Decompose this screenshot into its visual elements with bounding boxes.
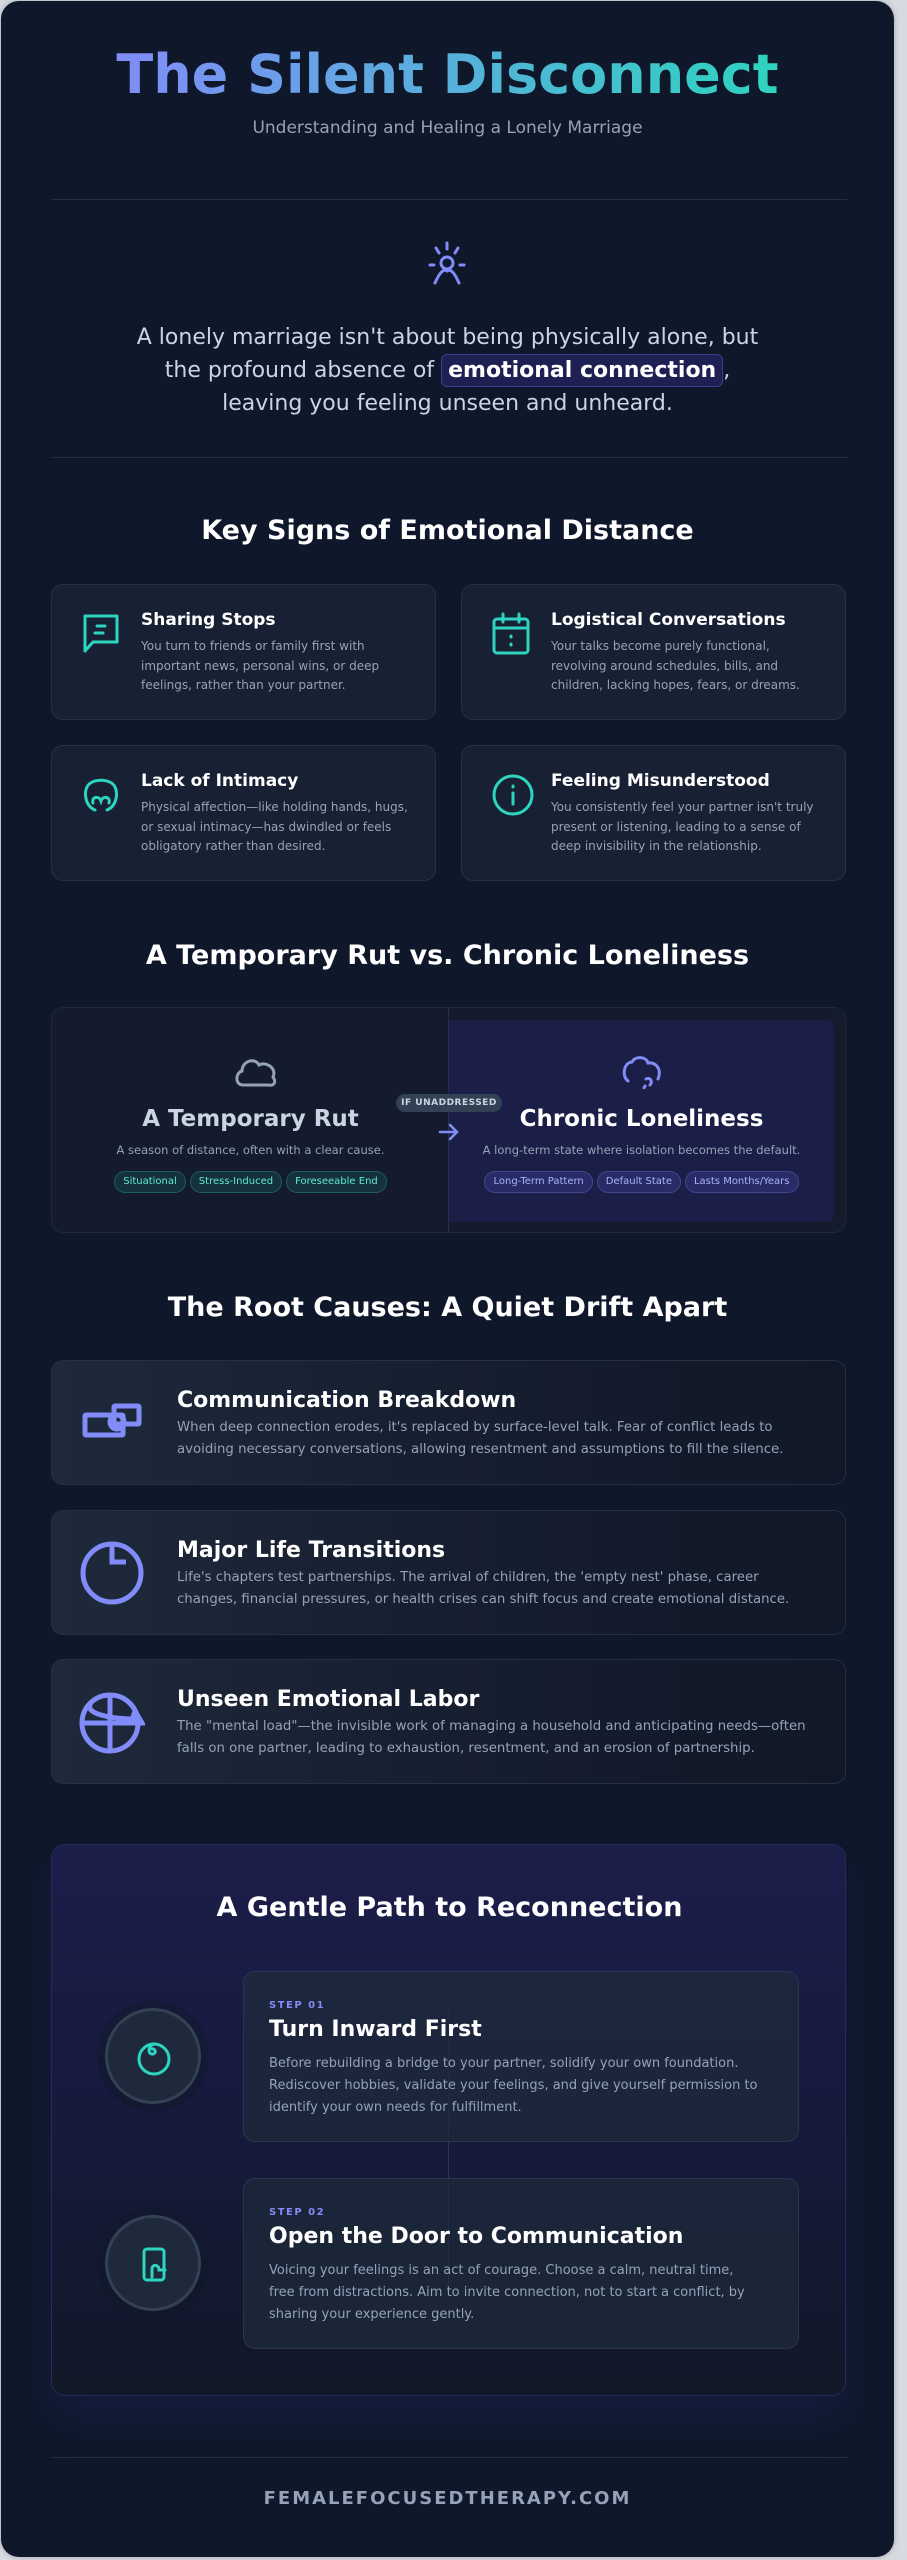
intro quote	[137, 325, 758, 416]
right highlight: chronic loneliness	[449, 1020, 834, 1222]
panel: major life transitions	[51, 1510, 846, 1635]
icon: step 2 door	[105, 2215, 201, 2311]
panel: comparison	[51, 1007, 846, 1233]
badge: if unaddressed	[396, 1094, 502, 1112]
desc: rut: A season of distance, often with a clear cause.	[117, 1143, 384, 1157]
tags: rut	[114, 1171, 387, 1193]
heading: reconnection: A Gentle Path to Reconnection	[217, 1892, 682, 1923]
icon: radiant person	[428, 242, 466, 284]
footer: FEMALEFOCUSEDTHERAPY.COM	[264, 2488, 631, 2509]
tags: rut: Situational	[123, 1176, 177, 1187]
title: temporary rut: A Temporary Rut	[142, 1106, 359, 1132]
panel: feeling misunderstood: You consistently feel your partner isn't truly present or listening, leading to a sense of deep invisibility in the relationship.	[551, 800, 814, 853]
arrow	[438, 1124, 459, 1140]
tags: rut: Stress-Induced	[199, 1176, 273, 1187]
tags: chronic: Lasts Months/Years	[694, 1176, 790, 1187]
tags: chronic: Long-Term Pattern	[493, 1176, 584, 1187]
tags: rut: Foreseeable End	[295, 1176, 378, 1187]
icon: calendar	[492, 612, 530, 654]
tags: chronic: Default State	[606, 1176, 672, 1187]
step 1 card	[243, 1971, 799, 2142]
step 1 card: Turn Inward First	[269, 2017, 482, 2042]
panel: lack of intimacy: Physical affection—like holding hands, hugs, or sexual intimacy—has dwindled or feels obligatory rather than desired.	[141, 800, 408, 853]
panel: unseen emotional labor	[51, 1659, 846, 1784]
panel: lack of intimacy	[51, 745, 436, 881]
intro quote: emotional connection	[448, 358, 716, 383]
panel: sharing stops: Sharing Stops	[141, 610, 276, 630]
panel: unseen emotional labor: Unseen Emotional Labor	[177, 1687, 479, 1712]
step 1 card: STEP 01	[269, 2000, 325, 2011]
icon: cloud	[235, 1059, 276, 1087]
step 2 card	[243, 2178, 799, 2349]
step 1 card: Before rebuilding a bridge to your partner, solidify your own foundation. Rediscover hobbies, validate your feelings, and give yourself permission to identify your own needs for fulfillment.	[269, 2056, 758, 2115]
intro quote: the profound absence of ,	[165, 358, 730, 383]
desc: chronic: A long-term state where isolation becomes the default.	[483, 1143, 800, 1157]
panel: lack of intimacy: Lack of Intimacy	[141, 771, 298, 791]
heading: key signs: Key Signs of Emotional Distance	[201, 515, 694, 546]
panel: communication breakdown: Communication Breakdown	[177, 1388, 516, 1413]
panel: feeling misunderstood	[461, 745, 846, 881]
panel: logistical conversations: Your talks become purely functional, revolving around schedules, bills, and children, lacking hopes, fears, or dreams.	[551, 639, 800, 692]
heading: root causes: The Root Causes: A Quiet Drift Apart	[168, 1292, 727, 1323]
step 2 card: Voicing your feelings is an act of courage. Choose a calm, neutral time, free from distractions. Aim to invite connection, not to start a conflict, by sharing your experience gently.	[269, 2263, 745, 2322]
panel: feeling misunderstood: Feeling Misunderstood	[551, 771, 770, 791]
subtitle: Understanding and Healing a Lonely Marriage	[252, 118, 643, 138]
badge: if unaddressed: IF UNADDRESSED	[401, 1098, 497, 1108]
step 2 card: STEP 02	[269, 2207, 325, 2218]
icon: info	[492, 774, 534, 816]
step 2 card: Open the Door to Communication	[269, 2224, 683, 2249]
panel: sharing stops	[51, 584, 436, 720]
intro quote: leaving you feeling unseen and unheard.	[222, 391, 673, 416]
icon: step 1 spiral	[105, 2008, 201, 2104]
panel: unseen emotional labor: The "mental load"—the invisible work of managing a household and anticipating needs—often falls on one partner, leading to exhaustion, resentment, and an erosion of partnership.	[177, 1719, 806, 1756]
panel: sharing stops: You turn to friends or family first with important news, personal wins, or deep feelings, rather than your partner.	[141, 639, 379, 692]
title: The Silent Disconnect	[116, 43, 779, 106]
icon: heart circle	[84, 778, 118, 812]
tags: chronic	[484, 1171, 799, 1193]
panel: logistical conversations: Logistical Conversations	[551, 610, 786, 630]
panel: communication breakdown	[51, 1360, 846, 1485]
icon: globe	[80, 1692, 145, 1754]
panel: logistical conversations	[461, 584, 846, 720]
panel: major life transitions: Life's chapters test partnerships. The arrival of children, the 'empty nest' phase, career changes, financial pressures, or health crises can shift focus and create emotional distance.	[177, 1570, 789, 1607]
panel: communication breakdown: When deep connection erodes, it's replaced by surface-level talk. Fear of conflict leads to avoiding necessary conversations, allowing resentment and assumptions to fill the silence.	[177, 1420, 783, 1457]
intro quote: A lonely marriage isn't about being physically alone, but	[137, 325, 758, 350]
heading: rut vs chronic: A Temporary Rut vs. Chronic Loneliness	[146, 940, 749, 971]
icon: clock	[80, 1542, 144, 1604]
icon: chat	[84, 614, 118, 653]
panel: major life transitions: Major Life Transitions	[177, 1538, 445, 1563]
title: chronic: Chronic Loneliness	[520, 1106, 763, 1132]
icon: rain cloud	[622, 1056, 661, 1089]
icon: links	[82, 1404, 142, 1438]
panel: gentle path	[51, 1844, 846, 2396]
